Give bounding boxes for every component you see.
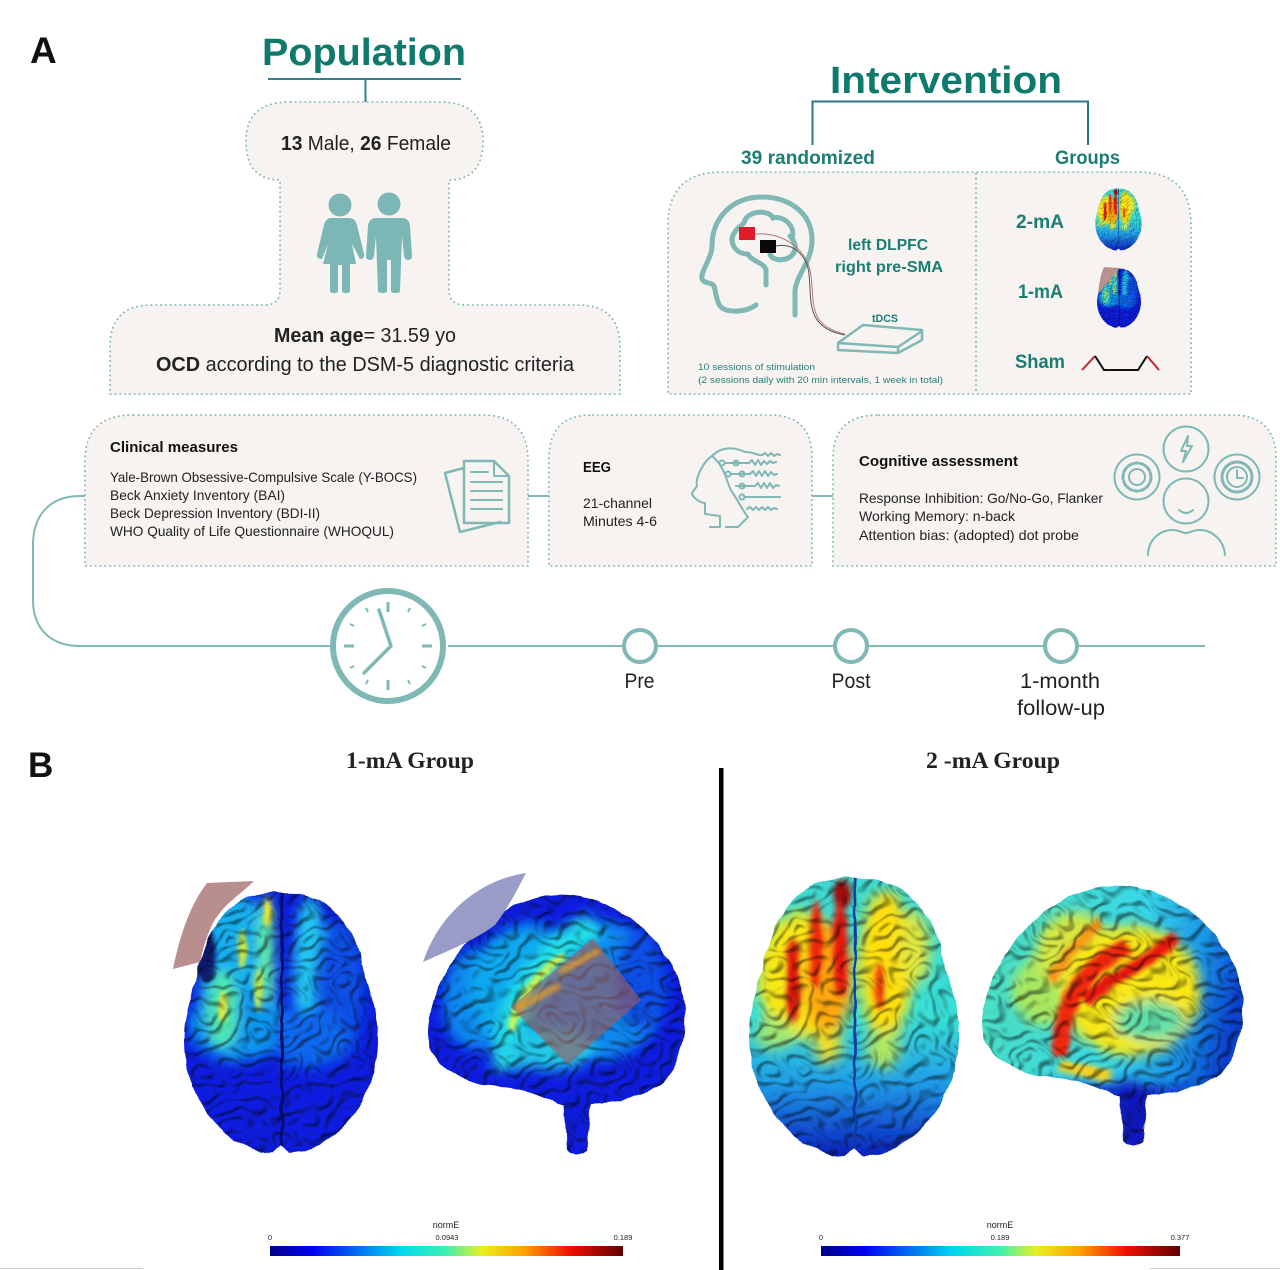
electrode: top view (173, 881, 254, 969)
colorbar: 2-mA (819, 1220, 1189, 1256)
text: stimulation schedule (698, 362, 943, 386)
icon: woman and man (317, 192, 412, 293)
population connector (268, 79, 461, 102)
timepoint: 1-month follow-up: follow-up (1017, 697, 1105, 720)
heading: Population: Population (262, 32, 466, 74)
panel: intervention (668, 172, 1191, 394)
text: stimulation targets: right pre-SMA (835, 259, 943, 276)
intervention bracket (812, 102, 1088, 145)
group label: 2-mA: 2-mA (1016, 212, 1064, 233)
bottom edge marks (0, 1268, 1280, 1270)
colorbar: 1-mA: normE (433, 1220, 459, 1230)
brain: 1-mA side view (420, 873, 695, 1165)
icon: 1-mA brain (1096, 267, 1142, 329)
list: cognitive tasks: Working Memory: n-back (859, 508, 1016, 524)
electrode: prefrontal plate (423, 873, 526, 962)
icon: person with thought circles (1114, 426, 1260, 555)
text: EEG details: 21-channel (583, 495, 652, 511)
text: stimulation targets: left DLPFC (848, 237, 928, 254)
panel: clinical measures (85, 415, 528, 566)
divider between groups (719, 768, 724, 1270)
brain: 2-mA top view (744, 875, 964, 1161)
colorbar: 2-mA: normE (987, 1220, 1013, 1230)
list: clinical scales: Beck Depression Inventory (BDI-II) (110, 505, 320, 521)
subheading: Groups: Groups (1055, 148, 1120, 169)
heading: EEG: EEG (583, 460, 611, 476)
icon: head with electrodes (702, 197, 845, 335)
panel label A: A (30, 30, 57, 71)
group label: 1-mA: 1-mA (1018, 282, 1063, 303)
text: diagnosis: OCD according to the DSM-5 diagnostic criteria (156, 354, 575, 376)
subheading: 39 randomized: 39 randomized (741, 148, 875, 169)
icon: 2-mA brain (1094, 188, 1143, 251)
colorbar: 1-mA: 0 (268, 1233, 272, 1242)
icon: EEG head with signals (692, 448, 780, 527)
panel: EEG (549, 415, 812, 566)
heading: cognitive assessment: Cognitive assessment (859, 454, 1018, 470)
list: clinical scales: WHO Quality of Life Questionnaire (WHOQUL) (110, 523, 394, 539)
list: cognitive tasks (859, 490, 1103, 543)
list: cognitive tasks: Response Inhibition: Go/No-Go, Flanker (859, 490, 1103, 506)
list: cognitive tasks: Attention bias: (adopted) dot probe (859, 527, 1079, 543)
colorbar: 2-mA: 0 (819, 1233, 823, 1242)
colorbar: 2-mA: 0.189 (991, 1233, 1009, 1242)
heading: 1-mA Group: 1-mA Group (346, 748, 474, 773)
colorbar: 1-mA: 0.0943 (436, 1233, 458, 1242)
list: clinical scales: Beck Anxiety Inventory (BAI) (110, 487, 285, 503)
colorbar: 2-mA: 0.377 (1171, 1233, 1189, 1242)
text: stimulation schedule: (2 sessions daily with 20 min intervals, 1 week in total) (698, 375, 943, 386)
timepoint: Post: Post (832, 670, 871, 693)
icon: tDCS device (838, 313, 922, 353)
timepoint: Pre: Pre (624, 670, 654, 693)
brain: 1-mA top view (173, 881, 383, 1157)
timepoint: Post (832, 630, 871, 693)
heading: clinical measures: Clinical measures (110, 440, 238, 456)
panel: cognitive assessment (833, 415, 1276, 566)
heading: 2-mA Group: 2 -mA Group (926, 748, 1060, 773)
icon: sham ramp waveform (1082, 356, 1159, 370)
label: tDCS: tDCS (872, 313, 898, 325)
text: sex counts: 13 Male, 26 Female (281, 133, 451, 155)
text: stimulation schedule: 10 sessions of stimulation (698, 362, 815, 373)
timeline connector lines (33, 496, 1205, 646)
list: clinical scales (110, 469, 417, 539)
list: clinical scales: Yale-Brown Obsessive-Compulsive Scale (Y-BOCS) (110, 469, 417, 485)
timepoint: 1-month follow-up: 1-month (1020, 670, 1100, 693)
text: mean age: Mean age= 31.59 yo (274, 325, 456, 347)
icon: documents (445, 461, 509, 532)
text: EEG details: Minutes 4-6 (583, 513, 657, 529)
timepoint: Pre (624, 630, 656, 693)
electrode: over temporal/frontal region (511, 938, 641, 1065)
colorbar: 1-mA: 0.189 (614, 1233, 632, 1242)
group label: Sham: Sham (1015, 352, 1065, 373)
brain: 2-mA side view (982, 886, 1244, 1146)
panel: population (110, 102, 620, 394)
timeline clock icon (333, 591, 443, 701)
colorbar: 1-mA (268, 1220, 632, 1256)
panel label B: B (28, 746, 53, 785)
timepoint: 1-month follow-up (1017, 630, 1105, 720)
text: stimulation targets (835, 237, 943, 276)
text: EEG details (583, 495, 657, 529)
heading: Intervention: Intervention (830, 60, 1062, 102)
